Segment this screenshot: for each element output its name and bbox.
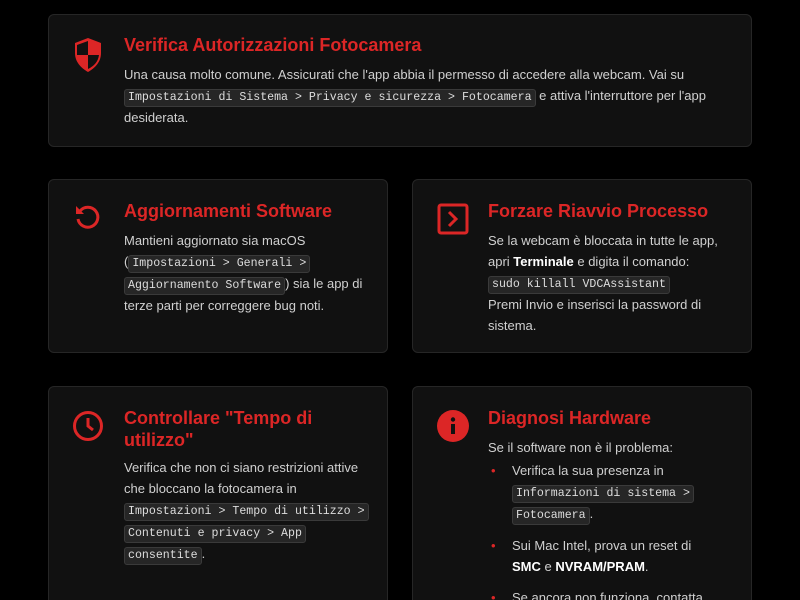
text: Fotocamera (516, 509, 586, 522)
heading: Verifica Autorizzazioni Fotocamera (124, 35, 421, 55)
text: Contenuti e privacy > App (128, 527, 302, 540)
text: Verifica la sua presenza in . (512, 463, 664, 521)
text: Sui Mac Intel, prova un reset di SMC e NVRAM/PRAM. (512, 538, 691, 574)
panel: camera permissions (48, 14, 752, 147)
icon: terminal (438, 204, 468, 234)
icon: info (437, 410, 469, 442)
text: Mantieni aggiornato sia macOS ( ) sia le app di terze parti per correggere bug noti. (124, 233, 362, 313)
panel: force restart (412, 179, 752, 353)
panel: software updates (48, 179, 388, 353)
text: Premi Invio e inserisci la password di sistema. (488, 297, 701, 333)
panel: hardware diagnosis (412, 386, 752, 600)
icon: clock (73, 411, 103, 441)
heading: Forzare Riavvio Processo (488, 201, 708, 221)
text: Se il software non è il problema: (488, 440, 673, 455)
heading: Controllare "Tempo di utilizzo" (124, 408, 312, 450)
heading: Diagnosi Hardware (488, 408, 651, 428)
text: Verifica che non ci siano restrizioni attive che bloccano la fotocamera in . (124, 460, 358, 561)
text: Informazioni di sistema > (516, 487, 690, 500)
icon: refresh (76, 206, 100, 229)
text: Se la webcam è bloccata in tutte le app, apri Terminale e digita il comando: (488, 233, 718, 269)
icon: shield (75, 38, 101, 72)
text: Impostazioni > Tempo di utilizzo > (128, 505, 365, 518)
text: Una causa molto comune. Assicurati che l'app abbia il permesso di accedere alla webcam. Vai su e attiva l'interruttore per l'app desiderata. (124, 67, 706, 125)
text (488, 440, 703, 600)
text: Impostazioni di Sistema > Privacy e sicurezza > Fotocamera (128, 91, 532, 104)
text: Impostazioni > Generali > (132, 257, 306, 270)
text: consentite (128, 549, 198, 562)
text: Aggiornamento Software (128, 279, 281, 292)
panel: screen time (48, 386, 388, 600)
heading: Aggiornamenti Software (124, 201, 332, 221)
text (488, 233, 718, 333)
text: sudo killall VDCAssistant (492, 278, 666, 291)
